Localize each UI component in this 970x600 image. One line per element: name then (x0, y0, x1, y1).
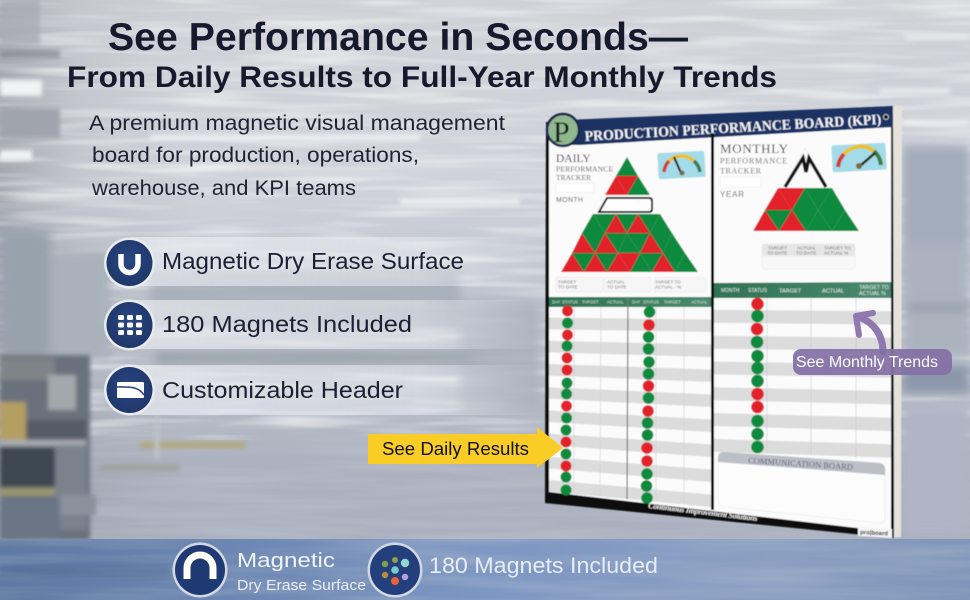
daily tracker labels: PERFORMANCE (556, 164, 613, 174)
board black frame (545, 106, 894, 538)
feature: customizable header: Customizable Header (162, 377, 403, 403)
feature: magnetic dry erase surface (104, 237, 545, 288)
monthly table: ACTUAL (822, 288, 844, 294)
intro text block: warehouse, and KPI teams (91, 177, 356, 200)
monthly totals box (762, 244, 855, 269)
daily table: TARGET (664, 300, 681, 304)
maker logo (858, 526, 892, 538)
daily pyramid bottom (561, 214, 698, 272)
daily gauge (657, 151, 706, 179)
monthly table: TARGET TO (859, 285, 889, 291)
feature: customizable header (104, 364, 545, 416)
monthly totals box: TO DATE (796, 250, 816, 256)
daily table: DAY (632, 300, 641, 304)
monthly pyramid peak (783, 148, 827, 188)
daily table: DAY (552, 300, 561, 304)
daily totals boxes: TARGET TO (655, 280, 681, 284)
monthly gauge (831, 143, 887, 172)
callout: see daily results (368, 427, 563, 468)
daily table: STATUS (643, 300, 659, 304)
monthly table: STATUS (748, 288, 768, 294)
badge: magnetic dry erase surface (172, 542, 366, 598)
feature: 180 magnets included: 180 Magnets Included (162, 311, 412, 337)
header bar: PRODUCTION PERFORMANCE BOARD (KPI) (584, 112, 882, 145)
title (67, 16, 777, 94)
monthly table: MONTH (721, 288, 740, 294)
daily status magnets left column (560, 306, 573, 496)
daily table: ACTUAL (691, 300, 708, 304)
monthly tracker labels: PERFORMANCE (720, 156, 787, 166)
daily tracker labels: DAILY (556, 153, 591, 165)
callout: see daily results: See Daily Results (382, 439, 529, 459)
daily tracker labels (556, 153, 613, 204)
board white surface (549, 124, 891, 532)
callout: see monthly trends (793, 313, 952, 375)
logo P: P (553, 116, 570, 149)
daily totals boxes: TARGET (558, 280, 576, 284)
monthly table: ACTUAL % (859, 291, 886, 297)
feature: 180 magnets included (104, 300, 545, 350)
daily pyramid top (605, 157, 650, 195)
communication board (718, 452, 885, 523)
daily totals boxes: TO DATE (607, 284, 626, 290)
daily table: TARGET (582, 300, 599, 304)
maker logo: pro|board (860, 530, 889, 537)
daily totals boxes: ACTUAL (607, 280, 626, 284)
bottom strip (0, 539, 970, 600)
panel: production performance board (545, 105, 902, 538)
feature: magnetic dry erase surface: Magnetic Dry Erase Surface (162, 248, 464, 274)
logo P (547, 114, 579, 149)
monthly totals box: ACTUAL % (824, 250, 849, 256)
center divider (711, 133, 714, 510)
monthly tracker labels (720, 141, 789, 199)
title: See Performance in Seconds— (108, 16, 689, 59)
intro text block: board for production, operations, (92, 144, 419, 167)
footer slogan: Continuous Improvement Solutions (648, 501, 758, 523)
badge: magnetic dry erase surface: Dry Erase Surface (237, 577, 366, 594)
monthly tracker labels: MONTHLY (720, 141, 789, 156)
monthly tracker labels: YEAR (720, 190, 744, 199)
badge: 180 magnets included: 180 Magnets Included (429, 553, 658, 578)
daily table: ACTUAL (607, 300, 624, 304)
monthly totals box: TARGET (768, 246, 787, 252)
monthly table: TARGET (779, 288, 802, 294)
badge: magnetic dry erase surface: Magnetic (237, 549, 335, 572)
daily totals boxes: ACTUAL - % (655, 284, 681, 290)
daily tracker labels: MONTH (556, 197, 583, 204)
board side edge (892, 105, 902, 538)
monthly status magnets (751, 298, 764, 453)
daily table (549, 297, 711, 507)
monthly totals box: ACTUAL (797, 246, 816, 252)
monthly table (714, 282, 891, 458)
daily totals boxes (556, 277, 706, 292)
badge: 180 magnets included (368, 542, 658, 598)
monthly tracker labels: TRACKER (720, 166, 762, 176)
title: From Daily Results to Full-Year Monthly Trends (67, 61, 777, 94)
daily totals boxes: TO DATE (558, 284, 577, 290)
daily table: STATUS (562, 300, 578, 304)
daily tracker labels: TRACKER (556, 173, 591, 182)
intro text block (89, 112, 505, 200)
intro text block: A premium magnetic visual management (89, 112, 505, 135)
daily status magnets right column (641, 306, 655, 504)
callout: see monthly trends: See Monthly Trends (796, 354, 938, 371)
monthly pyramid (753, 188, 859, 231)
monthly totals box: TARGET TO (824, 246, 851, 252)
monthly totals box: TO DATE (767, 250, 787, 256)
daily pyramid clip banner (599, 198, 652, 212)
communication board: COMMUNICATION BOARD (748, 455, 853, 472)
